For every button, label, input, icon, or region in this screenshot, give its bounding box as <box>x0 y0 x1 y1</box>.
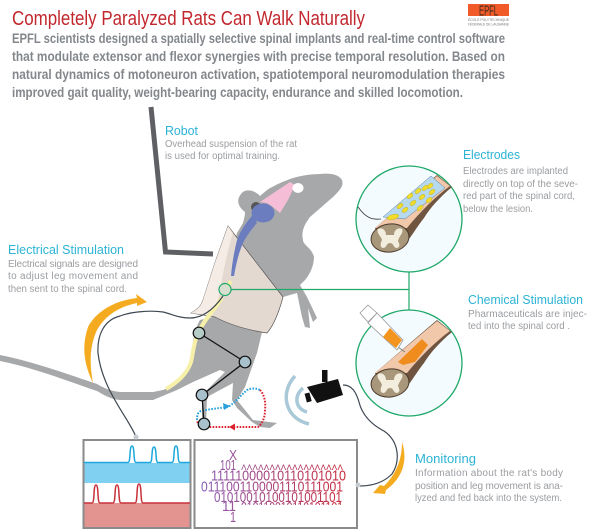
text: monitoring: Monitoring <box>415 451 476 466</box>
text: electrical stimulation: Electrical signals are designed <box>8 259 138 270</box>
wire node: data <box>356 482 360 488</box>
circle: chemical stimulation detail <box>356 305 462 416</box>
gait trajectory <box>197 388 265 427</box>
rat brain <box>260 182 295 213</box>
stimulation wire <box>98 296 223 437</box>
text: robot: Robot <box>165 123 198 138</box>
panel: binary data: 11111000010110101010 <box>211 468 346 484</box>
panel: binary data: 1 <box>230 509 236 526</box>
text: electrical stimulation <box>8 242 138 295</box>
rat eye <box>292 183 304 193</box>
intro text: improved gait quality, weight-bearing capacity, endurance and skilled locomotion. <box>12 84 463 100</box>
green connector <box>219 272 409 312</box>
text: electrodes: Electrodes <box>463 147 520 162</box>
brain stem spot <box>251 202 261 212</box>
text: electrodes <box>463 147 578 215</box>
intro text: natural dynamics of motoneuron activation, spatiotemporal neuromodulation therapies <box>12 66 505 82</box>
panel: binary data: 01010010100101001101 <box>214 489 342 506</box>
gait arrows <box>223 403 235 430</box>
text: electrical stimulation: then sent to the spinal cord. <box>8 284 127 295</box>
panel: binary data: XXXXXXXXXXXXXXXXXX <box>241 457 343 474</box>
orange arrow: monitoring <box>373 442 404 494</box>
leg skeleton <box>193 327 251 430</box>
panel: stimulation signals <box>84 440 190 528</box>
title: Completely Paralyzed Rats Can Walk Naturally <box>12 8 365 30</box>
intro text: that modulate extensor and flexor synergies with precise temporal resolution. Based on <box>12 48 505 64</box>
EPFL logo: FÉDÉRALE DE LAUSANNE <box>468 22 510 26</box>
text: chemical stimulation <box>468 292 587 332</box>
text: electrodes: red part of the spinal cord, <box>463 191 575 202</box>
spinal cord nerve: lower <box>166 281 231 389</box>
signal waves <box>286 376 309 424</box>
robot arm <box>151 107 213 254</box>
text: electrodes: below the lesion. <box>463 204 533 215</box>
EPFL logo: ÉCOLE POLYTECHNIQUE <box>468 17 510 22</box>
text: robot: Overhead suspension of the rat <box>165 139 297 150</box>
intro text <box>12 30 505 100</box>
text: electrodes: directly on top of the seve- <box>463 179 578 190</box>
text: monitoring: Information about the rat's body <box>415 468 563 479</box>
text: electrical stimulation: Electrical Stimulation <box>8 242 124 257</box>
EPFL logo <box>468 2 510 26</box>
camera <box>305 370 343 403</box>
panel: binary data: 11 <box>222 498 236 515</box>
panel: binary data: 010110010110101101 <box>241 499 343 516</box>
text: electrical stimulation: to adjust leg movement and <box>8 271 138 282</box>
text: monitoring: lyzed and fed back into the system. <box>415 493 562 504</box>
panel: binary data: 101 <box>220 457 236 474</box>
rat body <box>0 174 343 428</box>
circle: electrodes detail <box>356 166 462 272</box>
text: robot: is used for optimal training. <box>165 151 280 162</box>
orange arrow: electrical stimulation <box>84 294 147 383</box>
text: chemical stimulation: ted into the spinal cord . <box>468 321 570 332</box>
monitoring wire <box>343 385 397 486</box>
brain blob <box>252 204 274 222</box>
text: chemical stimulation: Pharmaceuticals are injec- <box>468 309 587 320</box>
text: robot <box>165 123 297 162</box>
panel: binary data: X <box>229 447 237 464</box>
wire node: signals <box>134 434 138 440</box>
panel: binary data: 0111001100001110111001 <box>201 478 343 496</box>
vial <box>360 305 405 352</box>
text: monitoring <box>415 451 563 504</box>
text: electrodes: Electrodes are implanted <box>463 166 568 177</box>
text: monitoring: position and leg movement is ana- <box>415 481 563 492</box>
EPFL logo: EPFL <box>479 2 498 20</box>
spinal cord nerve: upper <box>231 215 257 276</box>
panel: binary data <box>194 440 357 528</box>
harness vest <box>191 226 283 333</box>
text: chemical stimulation: Chemical Stimulation <box>468 292 583 307</box>
